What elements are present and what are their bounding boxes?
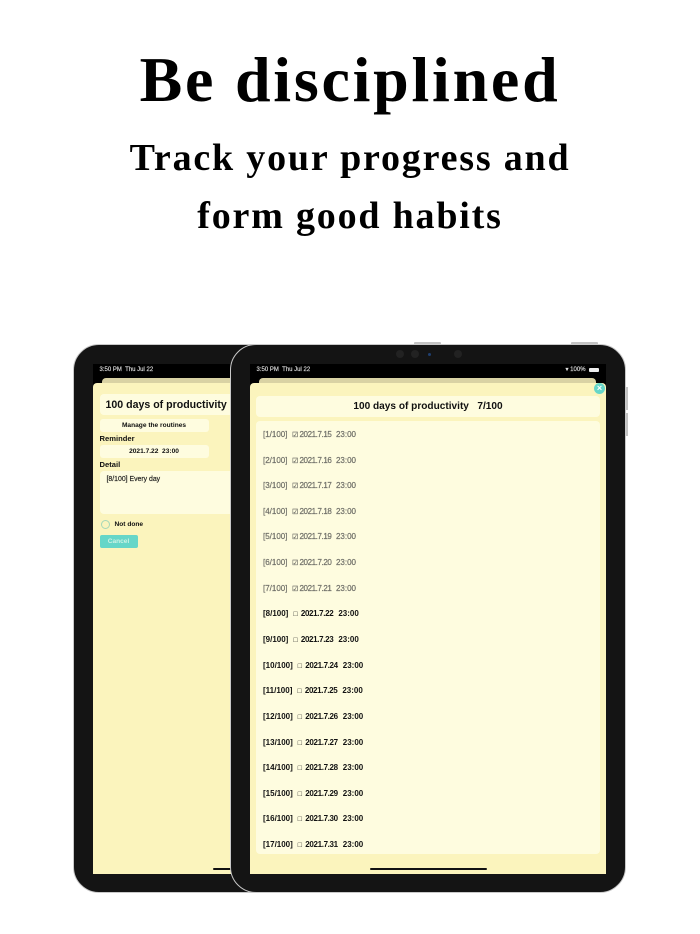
- progress list rows: [14/100] 2021.7.28 23:00: [263, 763, 363, 772]
- progress list rows: □: [298, 663, 302, 670]
- status label: Not done: [114, 520, 143, 528]
- progress list rows: □: [297, 688, 302, 695]
- progress list rows: [2/100] 2021.7.16 23:00: [263, 456, 356, 465]
- progress list rows: ☑: [292, 458, 298, 465]
- routine title card: [100, 394, 300, 414]
- status bar time: 3:50 PM Thu Jul 22: [100, 366, 153, 372]
- subtitle: Track your progress and: [130, 137, 570, 179]
- detail box: [100, 470, 300, 514]
- progress list rows: ☑: [292, 534, 298, 541]
- progress list rows: [1/100] 2021.7.15 23:00: [263, 430, 356, 439]
- progress list rows: □: [298, 816, 302, 823]
- progress list rows: [3/100] 2021.7.17 23:00: [263, 481, 356, 490]
- progress list rows: □: [298, 714, 302, 721]
- back sheet: [258, 378, 596, 398]
- progress list rows: [11/100] 2021.7.25 23:00: [263, 686, 363, 695]
- back sheet: [102, 378, 382, 398]
- progress list rows: [13/100] 2021.7.27 23:00: [263, 738, 363, 747]
- subtitle: [130, 137, 570, 237]
- progress list rows: [12/100] 2021.7.26 23:00: [263, 712, 363, 721]
- cancel button: Cancel: [108, 538, 129, 544]
- progress list rows: ☑: [292, 586, 298, 593]
- battery icon: [588, 368, 598, 372]
- progress list rows: ☑: [292, 483, 298, 490]
- progress list rows: [8/100] 2021.7.22 23:00: [263, 609, 359, 618]
- progress list rows: □: [298, 791, 302, 798]
- progress list rows: [4/100] 2021.7.18 23:00: [263, 507, 356, 516]
- progress list rows: [263, 430, 363, 849]
- detail label: Detail: [100, 460, 120, 468]
- manage button: Manage the routines: [122, 422, 186, 428]
- progress list rows: [7/100] 2021.7.21 23:00: [263, 584, 356, 593]
- progress list rows: [10/100] 2021.7.24 23:00: [263, 661, 363, 670]
- home indicator: [370, 868, 486, 870]
- reminder date: 2021.7.22 23:00: [129, 448, 179, 454]
- reminder label: Reminder: [100, 434, 135, 442]
- progress list rows: [6/100] 2021.7.20 23:00: [263, 558, 356, 567]
- progress list rows: □: [298, 842, 302, 849]
- home indicator: [212, 868, 252, 870]
- progress list rows: ☑: [292, 509, 298, 516]
- status bar time: 3:50 PM Thu Jul 22: [256, 366, 310, 372]
- progress list rows: ☑: [292, 432, 298, 439]
- screen: [250, 364, 606, 874]
- progress list rows: □: [298, 740, 302, 747]
- camera dots: [396, 350, 462, 358]
- progress list rows: [16/100] 2021.7.30 23:00: [263, 814, 363, 823]
- screen: [92, 364, 392, 874]
- progress list rows: □: [293, 611, 298, 618]
- manage button: [100, 418, 208, 432]
- status circle: [101, 520, 110, 529]
- reminder date: [100, 444, 208, 458]
- tablet: right, progress list: [230, 344, 626, 893]
- subtitle: form good habits: [197, 195, 503, 237]
- tablet top button: [571, 342, 598, 345]
- progress list rows: □: [293, 637, 298, 644]
- side button: [626, 387, 628, 410]
- routine title card: 100 days of productivity: [106, 398, 227, 410]
- cancel button: [100, 534, 138, 548]
- progress list rows: □: [298, 765, 302, 772]
- progress list rows: ☑: [292, 560, 298, 567]
- heading card: [256, 396, 600, 416]
- progress list rows: [9/100] 2021.7.23 23:00: [263, 635, 359, 644]
- tablet top button: [414, 342, 441, 345]
- sheet: [250, 382, 606, 874]
- sheet: [92, 382, 392, 874]
- status bar battery: ▾ 100%: [566, 366, 586, 372]
- progress list rows: [5/100] 2021.7.19 23:00: [263, 532, 356, 541]
- close button: [594, 383, 605, 394]
- heading card: 100 days of productivity 7/100: [353, 400, 503, 412]
- close button: ×: [597, 383, 602, 393]
- list card: [256, 420, 600, 854]
- side button: [626, 413, 628, 436]
- progress list rows: [15/100] 2021.7.29 23:00: [263, 789, 363, 798]
- progress list rows: [17/100] 2021.7.31 23:00: [263, 840, 363, 849]
- detail box: [8/100] Every day: [106, 476, 160, 482]
- tablet: left, routine detail: [73, 344, 373, 893]
- title: Be disciplined: [140, 44, 560, 115]
